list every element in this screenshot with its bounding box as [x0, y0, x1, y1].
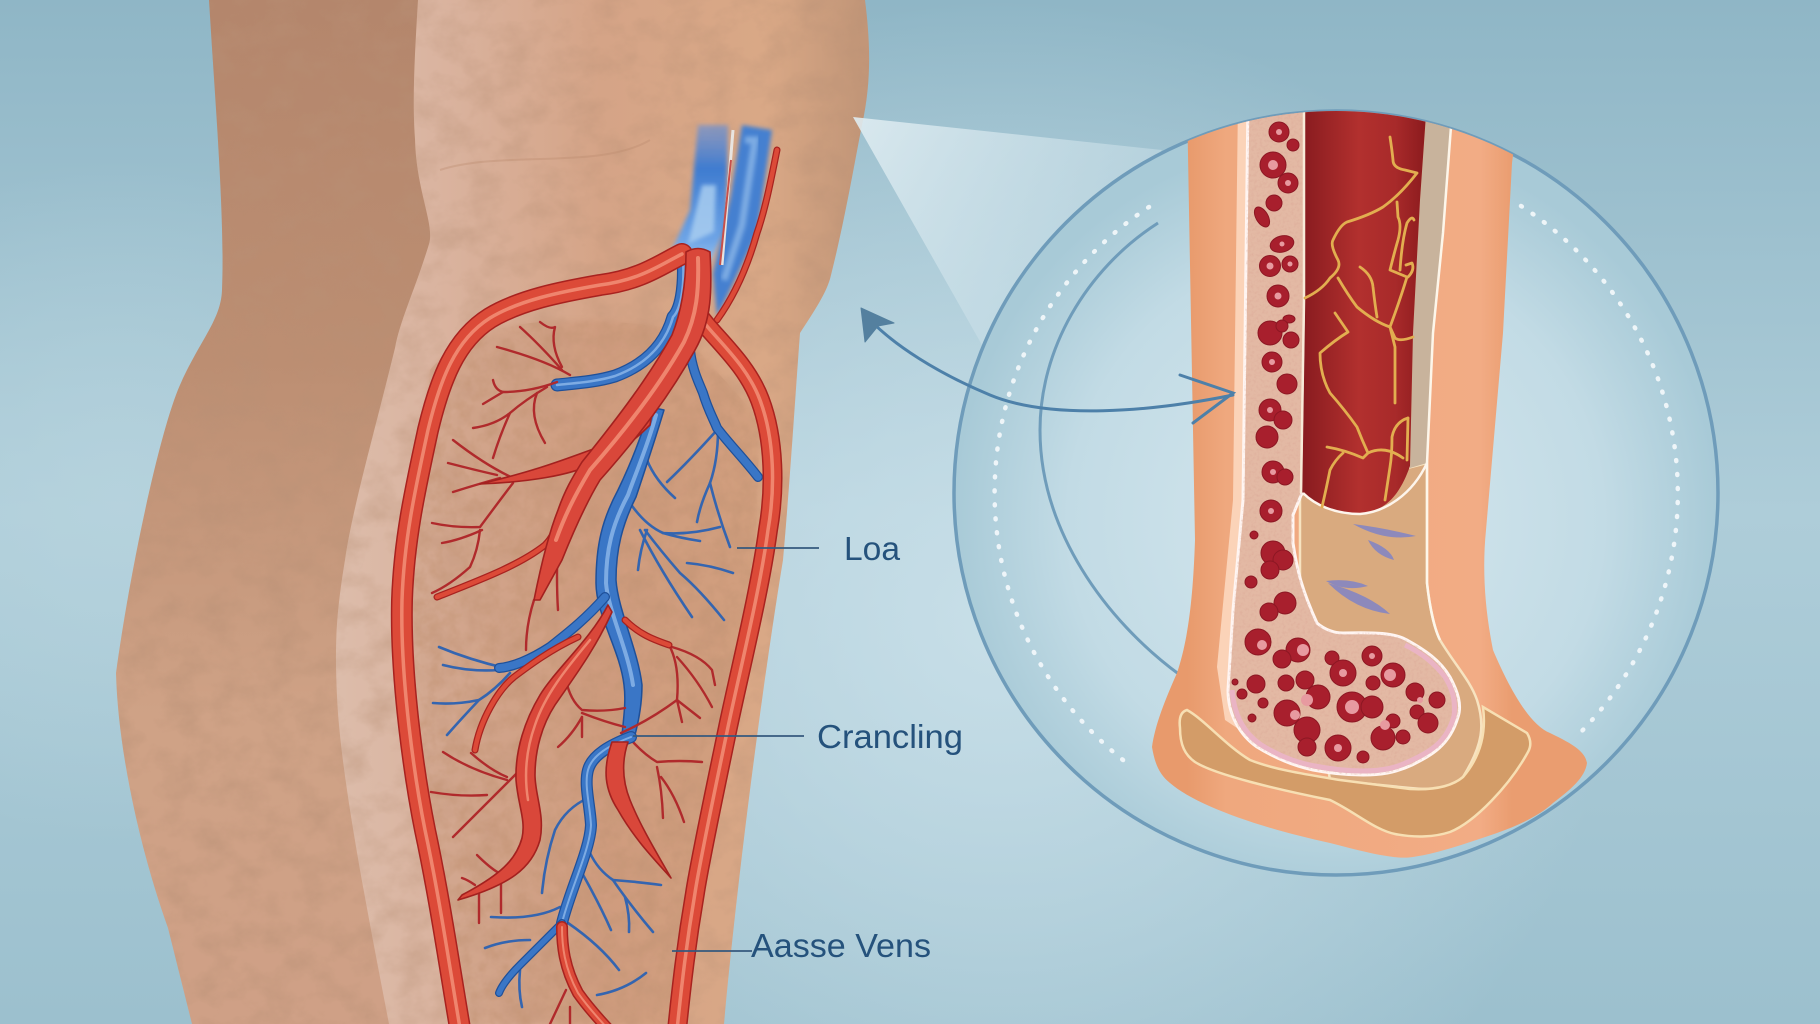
lower veins	[499, 597, 631, 993]
purple fibres	[1326, 524, 1416, 614]
nerves	[1305, 137, 1417, 507]
blue vein bundle at the knee	[672, 125, 777, 320]
main veins	[557, 257, 758, 742]
callout wedge	[853, 117, 1162, 345]
inner arc	[1040, 223, 1180, 675]
fine arteries	[431, 322, 715, 1024]
tan spongy bone	[1300, 463, 1481, 789]
label: Loa: Loa	[844, 530, 901, 567]
marrow pink rim	[1232, 645, 1455, 771]
heel plate	[1180, 707, 1530, 836]
label: Crancling: Crancling	[817, 718, 963, 755]
soft tissue	[1152, 100, 1587, 858]
curved arrow	[861, 308, 1233, 423]
veins and arteries of the leg	[402, 125, 777, 1024]
outer arteries and main branches	[402, 248, 773, 1024]
marrow strip	[1228, 100, 1460, 775]
front leg	[336, 0, 869, 1024]
back leg	[116, 0, 480, 1024]
fine veins	[433, 430, 733, 1007]
dotted ring	[995, 206, 1678, 767]
blood cell highlights	[1257, 129, 1423, 752]
label: Aasse Vens: Aasse Vens	[751, 927, 931, 964]
magnifier circle	[954, 111, 1718, 875]
pale layer	[1217, 100, 1248, 730]
column edge	[1301, 100, 1304, 493]
beige strip	[1410, 122, 1450, 468]
bone cross-section	[1152, 100, 1587, 858]
red column	[1302, 100, 1427, 513]
blood cells	[1232, 122, 1445, 763]
